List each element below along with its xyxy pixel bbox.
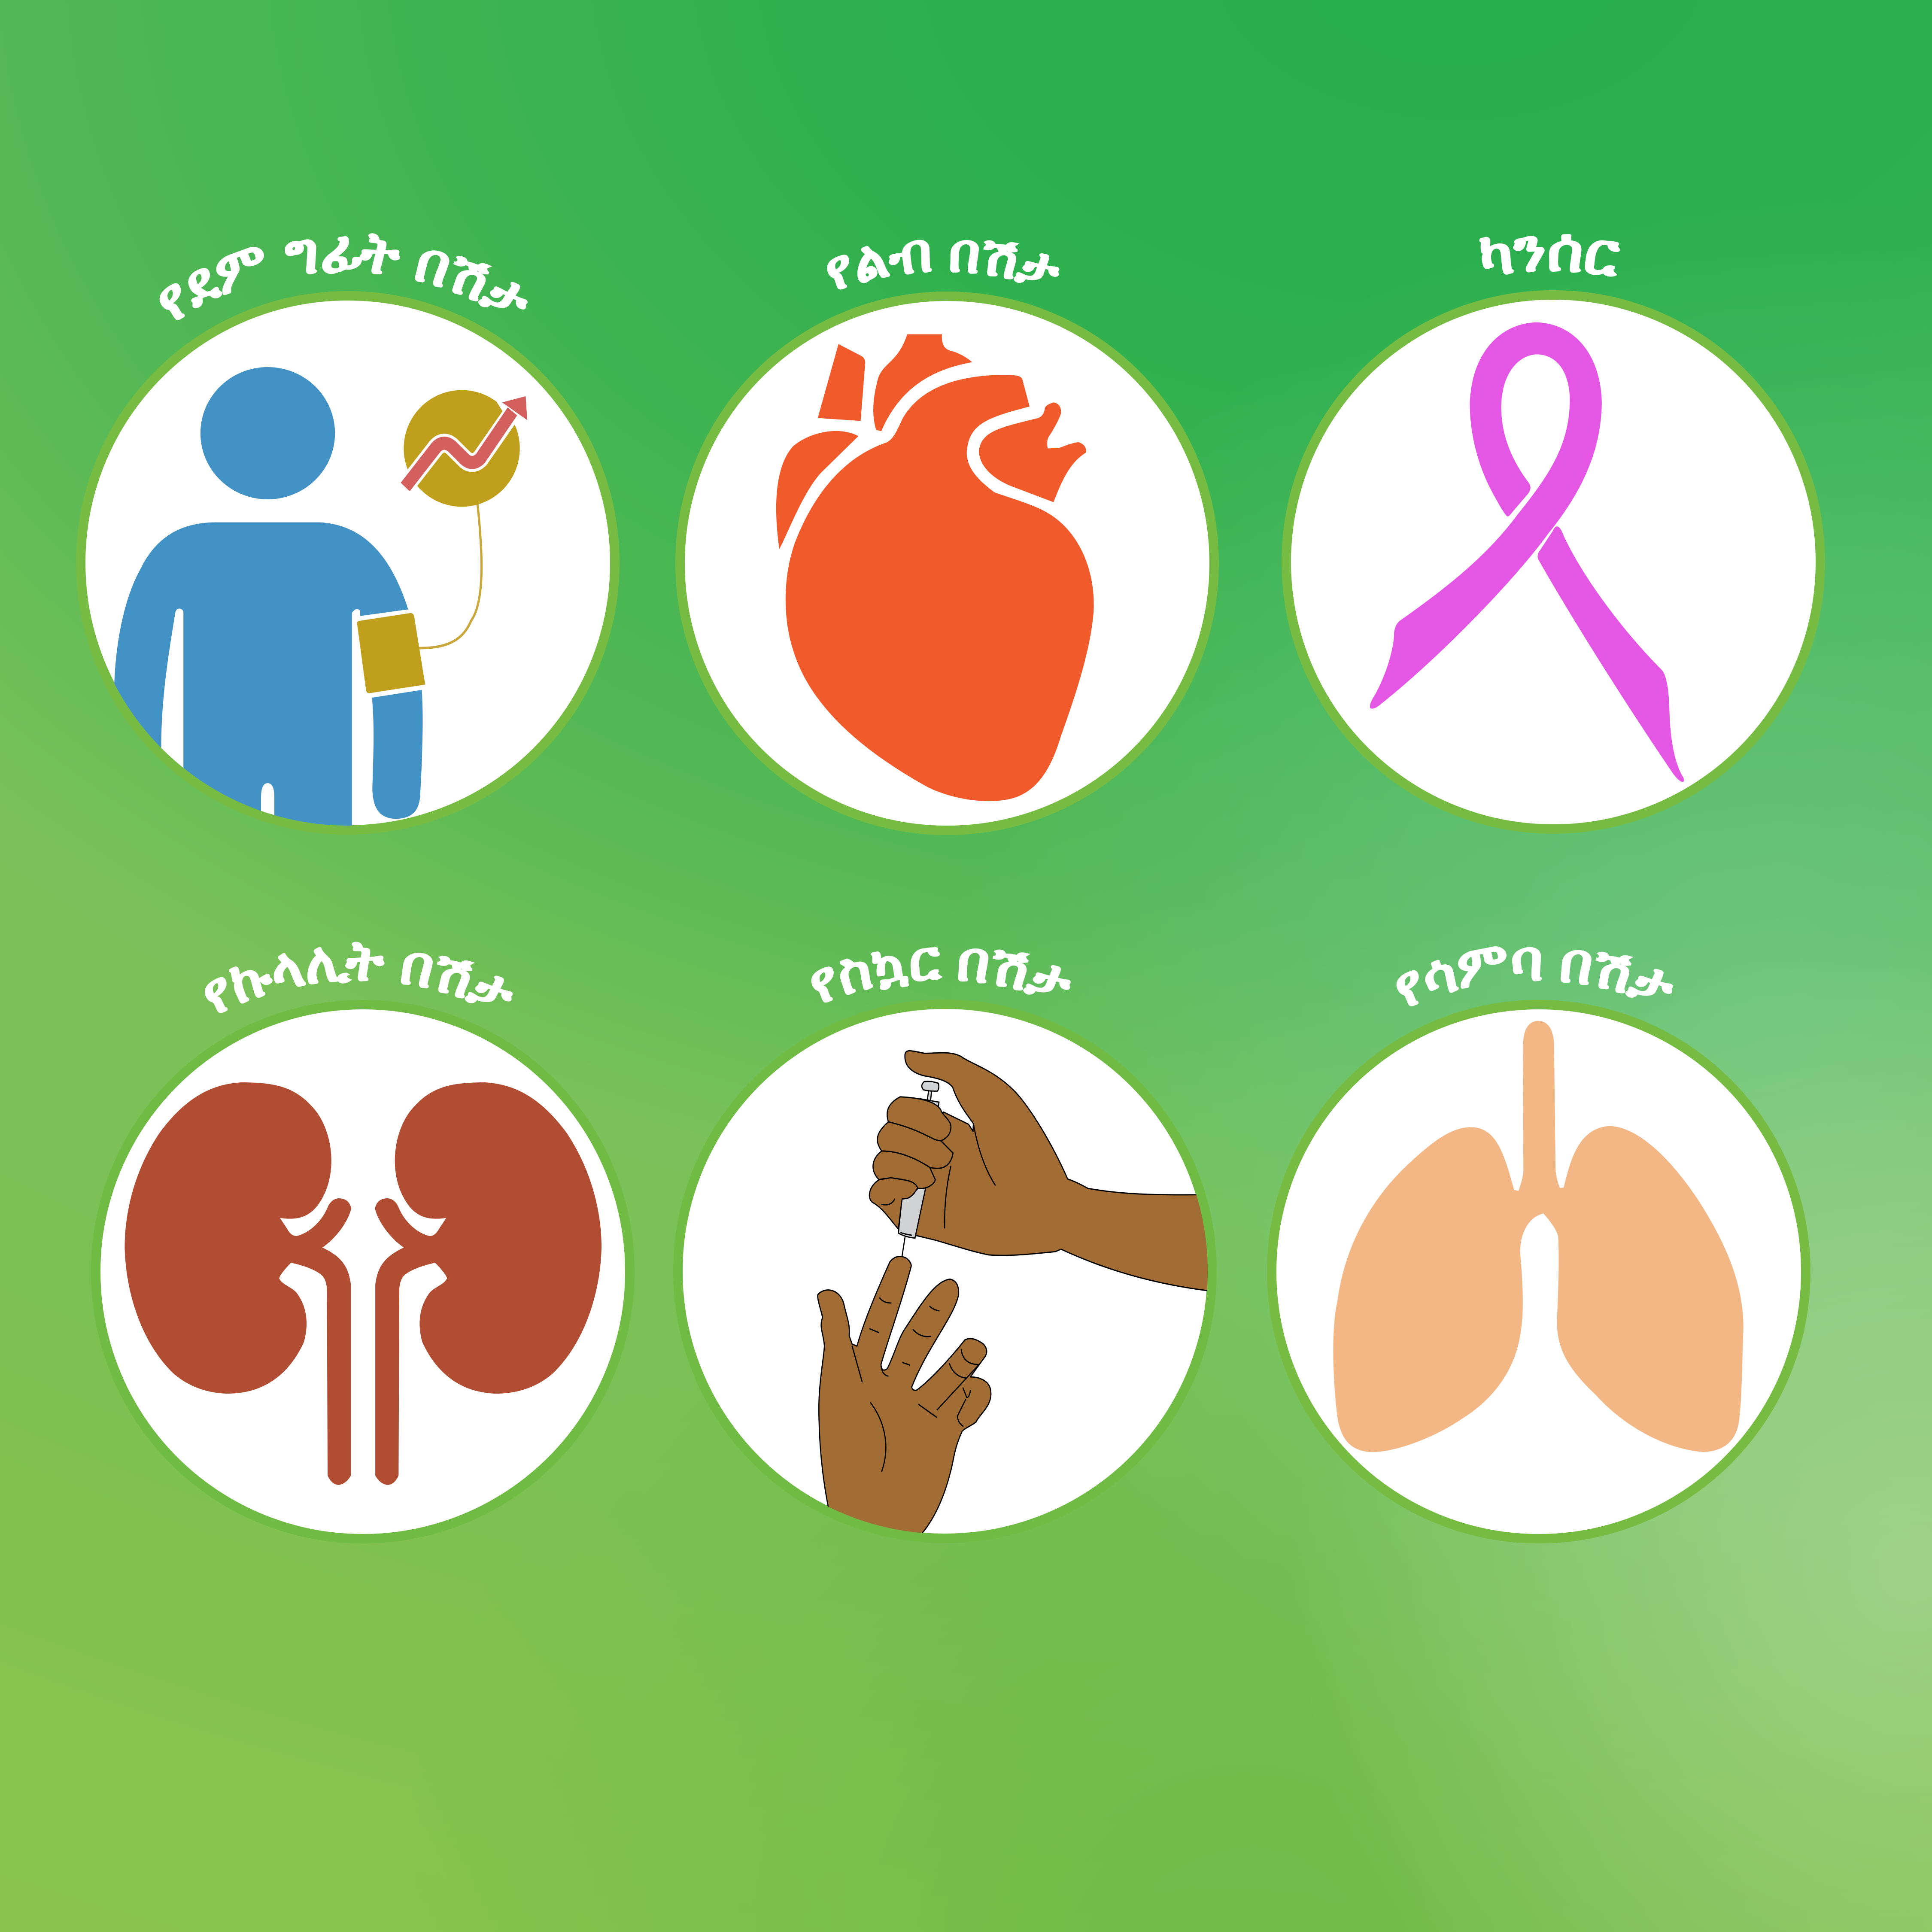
heading: lung disease: የሳምባ በሽታ <box>1385 930 1683 1019</box>
heading: heart disease: የልብ በሽታ <box>817 222 1068 302</box>
circle badge <box>96 1005 630 1539</box>
lower hand <box>817 1256 991 1564</box>
gauge <box>404 390 520 507</box>
forearm <box>372 690 423 819</box>
circle badge <box>680 296 1214 830</box>
icon: person with blood pressure cuff <box>101 367 531 847</box>
heading: cancer: ካንሰር <box>1474 215 1625 290</box>
icon: awareness ribbon <box>1370 322 1684 782</box>
panel: lung disease <box>1272 930 1806 1539</box>
arm gap <box>153 608 183 789</box>
infographic canvas <box>76 233 1825 1543</box>
gauge tube <box>416 502 482 648</box>
heading: diabetes: የስኳር በሽታ <box>800 929 1081 1015</box>
circle badge <box>1272 1005 1806 1539</box>
panel: cancer <box>1286 215 1820 829</box>
leg gap <box>261 783 274 847</box>
circle badge <box>1286 295 1820 829</box>
panel: kidney disease <box>96 929 630 1539</box>
heading: hypertension: የደም ግፊት በሽታ <box>144 219 542 334</box>
rising arrow <box>405 393 531 487</box>
icon: heart <box>776 334 1094 801</box>
circle badge <box>678 1004 1212 1538</box>
person body <box>114 522 408 826</box>
icon: hands with insulin syringe <box>817 1051 1227 1564</box>
syringe <box>898 1081 939 1261</box>
icon: lungs <box>1333 1021 1744 1452</box>
heading: kidney disease: የኩላሊት በሽታ <box>192 929 525 1027</box>
panel: diabetes <box>678 929 1227 1564</box>
panel: heart disease <box>680 222 1214 830</box>
icon: kidneys <box>125 1082 601 1485</box>
finger creases <box>852 1298 979 1471</box>
cuff <box>357 613 425 693</box>
panel: hypertension <box>81 219 615 847</box>
person head <box>200 367 335 499</box>
gripping fingers <box>869 1097 995 1229</box>
circle badge <box>81 296 615 830</box>
upper hand and arm <box>887 1051 1227 1293</box>
